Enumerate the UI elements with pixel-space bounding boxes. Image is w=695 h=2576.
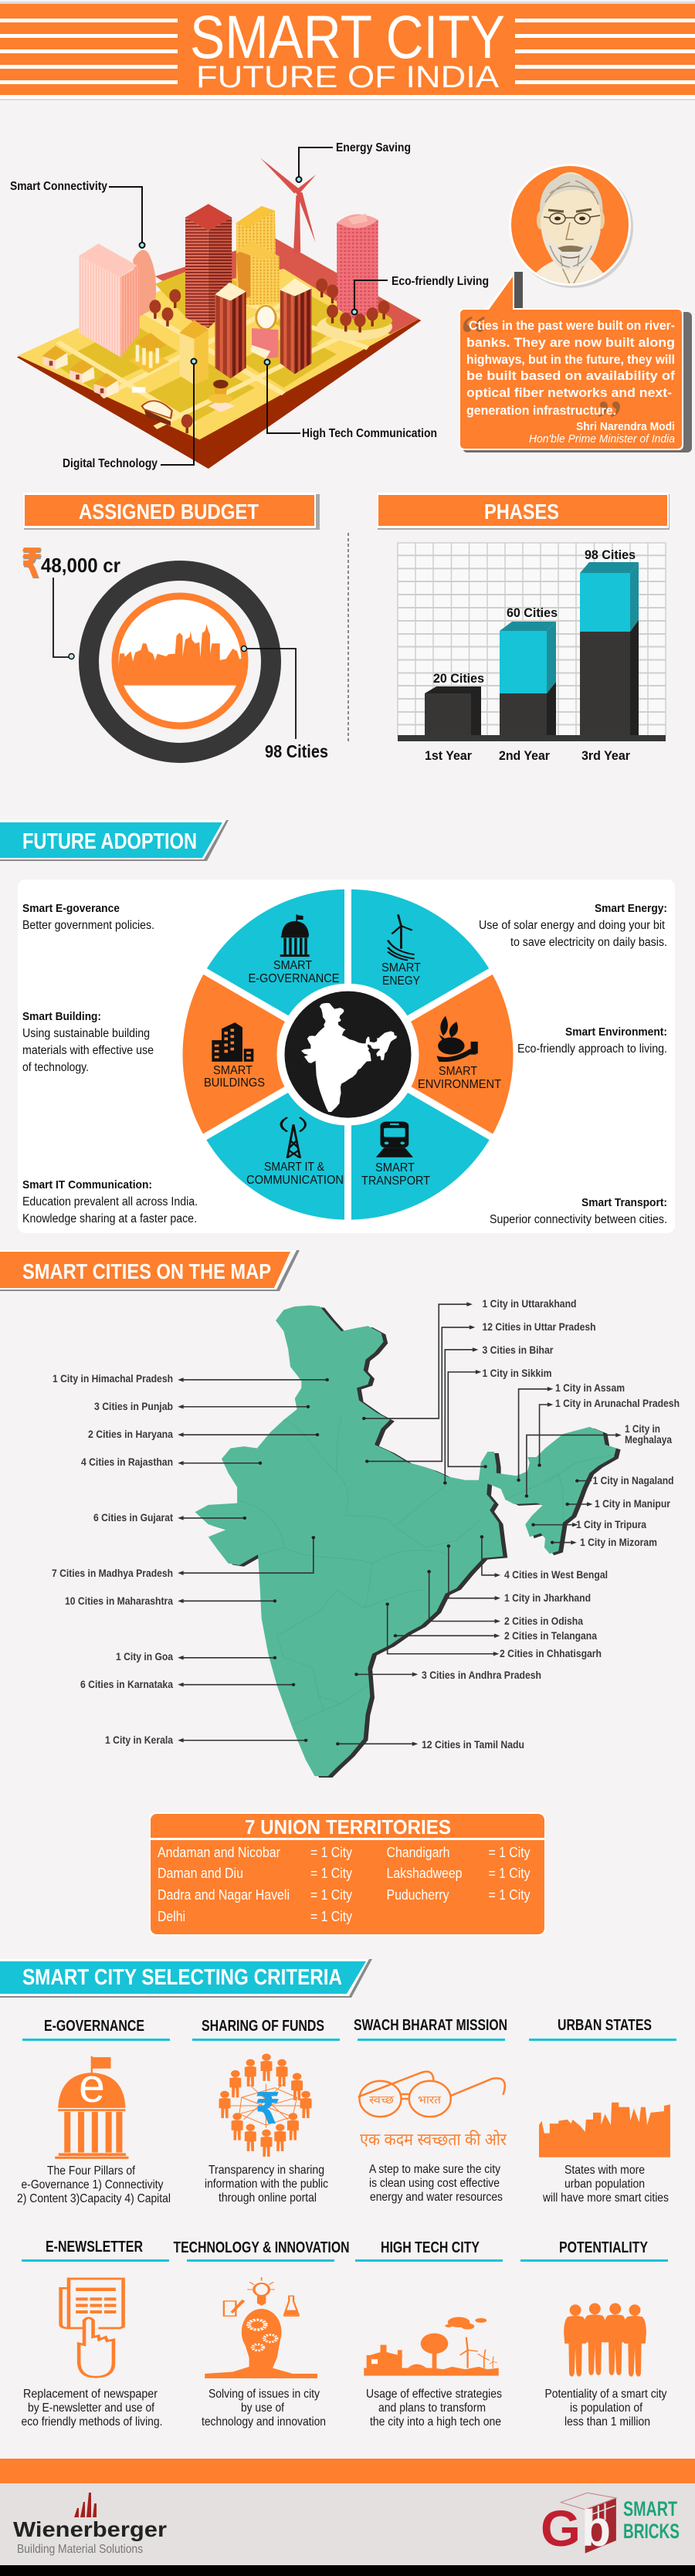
section ribbon: future adoption bbox=[0, 820, 229, 861]
panel: future adoption bbox=[18, 880, 675, 1233]
territory list: Delhi bbox=[158, 1909, 185, 1924]
criterion: swach bharat mission: एक कदम स्वच्छता की ओर bbox=[360, 2130, 507, 2149]
description bbox=[17, 2164, 171, 2205]
territory list: = 1 City bbox=[488, 1887, 530, 1903]
state labels: west: 7 Cities in Madhya Pradesh bbox=[52, 1567, 173, 1579]
clock and shop bbox=[250, 306, 278, 359]
state labels: west: 1 City in Goa bbox=[116, 1650, 173, 1663]
description: Transparency in sharing bbox=[208, 2164, 324, 2177]
criterion: e-newsletter bbox=[22, 2239, 169, 2429]
criterion: potentiality bbox=[520, 2239, 668, 2429]
text: smart IT communication: Education prevalent all across India. bbox=[22, 1195, 198, 1208]
axis labels: 2nd Year bbox=[499, 748, 550, 763]
logo: GB Smart Bricks: b bbox=[581, 2500, 611, 2557]
section ribbon: smart city selecting criteria bbox=[0, 1959, 372, 1998]
state labels: east: 1 City in Assam bbox=[555, 1381, 625, 1394]
wheel labels: SMART bbox=[381, 961, 421, 974]
salmon dome tower bbox=[133, 250, 156, 317]
description: Solving of issues in city bbox=[208, 2388, 320, 2401]
text: smart e-governance bbox=[22, 902, 154, 932]
description bbox=[366, 2388, 502, 2429]
text: smart environment: Smart Environment: bbox=[565, 1025, 667, 1039]
description: and plans to transform bbox=[378, 2401, 486, 2415]
description: urban population bbox=[564, 2178, 645, 2191]
text: smart building: of technology. bbox=[22, 1061, 89, 1074]
territory list: = 1 City bbox=[310, 1845, 352, 1860]
quote text: be built based on availability of bbox=[466, 368, 675, 383]
panel: assigned budget heading bbox=[23, 493, 320, 530]
text: smart energy: Use of solar energy and doing your bit bbox=[479, 919, 666, 932]
quote text bbox=[466, 318, 675, 418]
description: the city into a high tech one bbox=[370, 2415, 501, 2429]
description bbox=[22, 2388, 162, 2429]
wheel labels: COMMUNICATION bbox=[246, 1174, 344, 1187]
skyline bbox=[117, 624, 244, 686]
description bbox=[205, 2164, 328, 2205]
state labels: east: Meghalaya bbox=[625, 1433, 672, 1446]
panel: assigned budget heading: ASSIGNED BUDGET bbox=[79, 500, 259, 524]
icon: newsletter and hand bbox=[61, 2279, 124, 2377]
description: eco friendly methods of living. bbox=[22, 2415, 162, 2429]
state labels: east: 3 Cities in Andhra Pradesh bbox=[422, 1669, 541, 1681]
label: eco-friendly living: Eco-friendly Living bbox=[392, 275, 489, 288]
territory list: Dadra and Nagar Haveli bbox=[158, 1887, 290, 1903]
icon: smart energy turbine bbox=[388, 914, 415, 961]
text: smart transport: Smart Transport: bbox=[581, 1196, 667, 1209]
icon: smart IT tower bbox=[281, 1117, 305, 1158]
description: by E-newsletter and use of bbox=[28, 2401, 154, 2415]
state labels: west: 3 Cities in Punjab bbox=[94, 1400, 173, 1412]
state labels: west: 6 Cities in Gujarat bbox=[93, 1511, 173, 1524]
description: energy and water resources bbox=[370, 2191, 503, 2204]
quote text: generation infrastructure. bbox=[466, 403, 616, 418]
icon: white India map bbox=[301, 1003, 397, 1112]
wheel labels: SMART bbox=[439, 1065, 477, 1078]
icon: beaker bbox=[284, 2296, 299, 2316]
label: high tech communication: High Tech Communication bbox=[302, 427, 437, 440]
criterion: swach bharat mission: भारत bbox=[418, 2093, 442, 2106]
state labels: east: 1 City in Nagaland bbox=[593, 1474, 673, 1486]
leader dots bbox=[243, 1378, 579, 1745]
budget amount: ₹ bbox=[21, 541, 42, 587]
description: The Four Pillars of bbox=[47, 2164, 135, 2178]
text: smart energy: Smart Energy: bbox=[595, 902, 667, 915]
state labels: west: 1 City in Kerala bbox=[105, 1734, 173, 1746]
territory list: Daman and Diu bbox=[158, 1866, 243, 1881]
text: smart e-governance: Better government policies. bbox=[22, 919, 154, 932]
description: Usage of effective strategies bbox=[366, 2388, 502, 2401]
quote marks: ” bbox=[596, 388, 623, 455]
icon: group of people bbox=[564, 2303, 646, 2377]
text: smart transport bbox=[490, 1196, 667, 1226]
panel: phases heading bbox=[377, 493, 670, 530]
title: SMART CITY bbox=[190, 2, 505, 71]
rose tower bbox=[337, 214, 378, 320]
text: smart energy bbox=[479, 902, 667, 949]
axis labels: 3rd Year bbox=[581, 748, 630, 763]
isometric smart city illustration bbox=[17, 158, 421, 469]
yellow middle tower bbox=[236, 241, 280, 305]
market stall bbox=[142, 401, 172, 426]
city callout lines and labels bbox=[10, 141, 489, 470]
criterion: potentiality: POTENTIALITY bbox=[559, 2239, 649, 2256]
logo: GB Smart Bricks: G bbox=[541, 2500, 581, 2557]
icon: people around rupee bbox=[219, 2054, 312, 2157]
quote box with speech tail bbox=[459, 272, 692, 455]
quote attribution bbox=[529, 420, 675, 446]
striped tower left bbox=[215, 283, 246, 378]
portrait: Narendra Modi bbox=[509, 164, 633, 288]
state labels: east: 1 City in Jharkhand bbox=[504, 1591, 591, 1604]
state labels: east: 1 City in Mizoram bbox=[580, 1536, 657, 1548]
quote attribution: Shri Narendra Modi bbox=[576, 420, 675, 433]
text: smart building bbox=[22, 1010, 154, 1074]
quote text: banks. They are now built along bbox=[466, 335, 675, 350]
section ribbon: smart cities on the map: SMART CITIES ON THE MAP bbox=[22, 1259, 271, 1283]
wheel labels: E-GOVERNANCE bbox=[249, 972, 340, 985]
description bbox=[369, 2163, 503, 2204]
quote text: Cties in the past were built on river- bbox=[469, 318, 675, 333]
state labels: west: 1 City in Himachal Pradesh bbox=[53, 1372, 173, 1385]
budget donut chart bbox=[21, 541, 328, 761]
criterion: e-newsletter: E-NEWSLETTER bbox=[46, 2239, 143, 2256]
leader lines bbox=[179, 1304, 619, 1744]
criterion: sharing of funds bbox=[192, 2018, 340, 2205]
description: is clean using cost effective bbox=[369, 2177, 500, 2190]
logo: Wienerberger bbox=[13, 2493, 167, 2556]
text: smart environment bbox=[517, 1025, 667, 1056]
bar value labels: 98 Cities bbox=[585, 547, 636, 562]
icon: e-governance building bbox=[55, 2056, 128, 2159]
icon: smart buildings bbox=[212, 1022, 253, 1062]
quote text: highways, but in the future, they will bbox=[466, 352, 675, 367]
description: 2) Content 3)Capacity 4) Capital bbox=[17, 2192, 171, 2205]
description: by use of bbox=[241, 2401, 284, 2415]
trees bbox=[149, 279, 390, 433]
section ribbon: smart cities on the map bbox=[0, 1250, 300, 1291]
bar value labels: 60 Cities bbox=[507, 605, 558, 620]
pink tall tower bbox=[79, 244, 140, 358]
axis labels: 1st Year bbox=[425, 748, 472, 763]
state labels: east: 4 Cities in West Bengal bbox=[504, 1568, 608, 1581]
quote text: optical fiber networks and next- bbox=[466, 385, 672, 400]
territory list: = 1 City bbox=[310, 1909, 352, 1924]
text: smart IT communication: Smart IT Communication: bbox=[22, 1178, 152, 1191]
car bbox=[132, 387, 145, 392]
bar value labels: 20 Cities bbox=[433, 671, 484, 686]
dark red tower bbox=[185, 204, 232, 328]
criterion: technology and innovation bbox=[173, 2239, 349, 2429]
description: information with the public bbox=[205, 2178, 328, 2191]
striped tower right bbox=[280, 279, 312, 374]
criterion: high tech city bbox=[355, 2239, 503, 2429]
state labels: east: 1 City in Arunachal Pradesh bbox=[555, 1397, 680, 1409]
icon: urban skyline bbox=[539, 2103, 670, 2157]
logo: Wienerberger: Wienerberger bbox=[13, 2517, 167, 2541]
description: States with more bbox=[564, 2164, 645, 2177]
section ribbon: future adoption: FUTURE ADOPTION bbox=[22, 829, 197, 854]
territory list: Puducherry bbox=[386, 1887, 449, 1903]
logo: GB Smart Bricks bbox=[541, 2493, 680, 2557]
criterion: swach bharat mission: स्वच्छ bbox=[369, 2093, 395, 2106]
wheel labels: SMART bbox=[273, 959, 312, 972]
state labels: east: 1 City in bbox=[625, 1422, 660, 1435]
quote marks: “ bbox=[460, 303, 487, 370]
description bbox=[545, 2388, 667, 2429]
wind turbine bbox=[260, 158, 316, 253]
state labels: east: 1 City in Tripura bbox=[576, 1518, 646, 1530]
cities count: 98 Cities bbox=[265, 741, 328, 761]
yellow back tower bbox=[236, 206, 276, 259]
logo: Wienerberger: Building Material Solutions bbox=[17, 2543, 143, 2556]
text: smart building: Using sustainable building bbox=[22, 1027, 150, 1040]
wheel labels: TRANSPORT bbox=[361, 1174, 430, 1188]
criterion: swach bharat mission: SWACH BHARAT MISSION bbox=[354, 2017, 507, 2034]
axis labels bbox=[425, 748, 630, 763]
text: smart transport: Superior connectivity between cities. bbox=[490, 1213, 667, 1226]
icon: Gandhi glasses bbox=[358, 2072, 505, 2117]
state labels: east: 2 Cities in Odisha bbox=[504, 1615, 583, 1627]
leader arrowheads bbox=[178, 1302, 622, 1746]
wheel labels: BUILDINGS bbox=[204, 1076, 265, 1090]
bar: 1st year bbox=[425, 686, 481, 735]
territory list: = 1 City bbox=[488, 1866, 530, 1881]
criterion: e-governance bbox=[17, 2018, 171, 2205]
bar: 2nd year bbox=[500, 622, 556, 735]
state labels: west bbox=[52, 1372, 173, 1746]
text: smart IT communication: Knowledge sharing at a faster pace. bbox=[22, 1212, 197, 1225]
state labels: west: 6 Cities in Karnataka bbox=[80, 1678, 173, 1690]
budget amount: ₹ bbox=[22, 542, 43, 588]
budget amount bbox=[21, 541, 120, 588]
text: smart IT communication bbox=[22, 1178, 198, 1225]
subtitle: FUTURE OF INDIA bbox=[196, 60, 499, 94]
description: Replacement of newspaper bbox=[23, 2388, 158, 2401]
wheel labels: ENEGY bbox=[382, 974, 420, 988]
description: through online portal bbox=[219, 2191, 317, 2205]
icon: green city bbox=[364, 2317, 499, 2376]
label: digital technology: Digital Technology bbox=[63, 457, 158, 470]
quote marks bbox=[460, 303, 623, 455]
state labels: east: 2 Cities in Telangana bbox=[504, 1629, 597, 1642]
description bbox=[202, 2388, 326, 2429]
section ribbon: smart city selecting criteria: SMART CITY SELECTING CRITERIA bbox=[22, 1965, 342, 1990]
territory list: = 1 City bbox=[488, 1845, 530, 1860]
territory list bbox=[158, 1845, 530, 1924]
criterion: e-governance: E-GOVERNANCE bbox=[44, 2018, 144, 2035]
icon: smart transport train bbox=[376, 1122, 413, 1158]
wheel labels: SMART bbox=[375, 1161, 415, 1174]
wheel labels: ENVIRONMENT bbox=[418, 1078, 501, 1091]
criterion: e-governance: e bbox=[79, 2059, 105, 2113]
territory list: Andaman and Nicobar bbox=[158, 1845, 280, 1860]
criterion: swach bharat mission bbox=[354, 2017, 507, 2204]
state labels: east: 12 Cities in Tamil Nadu bbox=[422, 1738, 524, 1751]
territory list: = 1 City bbox=[310, 1866, 352, 1881]
text: smart energy: to save electricity on daily basis. bbox=[510, 936, 667, 949]
criterion: sharing of funds: ₹ bbox=[255, 2084, 280, 2134]
state labels: east: 3 Cities in Bihar bbox=[482, 1344, 554, 1356]
footer logos panel bbox=[0, 2483, 695, 2576]
panel: 7 union territories bbox=[149, 1812, 546, 1936]
label: smart connectivity: Smart Connectivity bbox=[10, 180, 107, 193]
text: smart building: Smart Building: bbox=[22, 1010, 101, 1023]
header banner bbox=[0, 2, 695, 100]
description: e-Governance 1) Connectivity bbox=[22, 2178, 164, 2191]
criterion: high tech city: HIGH TECH CITY bbox=[381, 2239, 480, 2256]
description: is population of bbox=[570, 2401, 642, 2415]
icon: bulb bbox=[247, 2277, 275, 2306]
state labels: east: 2 Cities in Chhatisgarh bbox=[500, 1647, 602, 1659]
panel: 7 union territories: 7 UNION TERRITORIES bbox=[245, 1815, 451, 1839]
territory list: Chandigarh bbox=[386, 1845, 449, 1860]
budget amount: 48,000 cr bbox=[41, 554, 120, 577]
panel: phases heading: PHASES bbox=[484, 500, 559, 524]
bar value labels bbox=[433, 547, 636, 686]
cup monument bbox=[208, 380, 235, 412]
icon: head with gears bbox=[205, 2277, 317, 2378]
houses bbox=[42, 346, 119, 397]
state labels: west: 10 Cities in Maharashtra bbox=[65, 1595, 173, 1607]
quote attribution: Hon'ble Prime Minister of India bbox=[529, 432, 675, 446]
criterion: technology and innovation: TECHNOLOGY & INNOVATION bbox=[173, 2239, 349, 2256]
India map with state leader lines bbox=[52, 1297, 680, 1778]
icon: tablet and pen bbox=[224, 2300, 245, 2316]
text: smart e-governance: Smart E-goverance bbox=[22, 902, 120, 915]
state labels: east: 12 Cities in Uttar Pradesh bbox=[482, 1320, 596, 1333]
bar chart: phases bbox=[398, 543, 666, 763]
description bbox=[542, 2164, 669, 2205]
wheel labels: SMART IT & bbox=[264, 1161, 324, 1174]
description: will have more smart cities bbox=[542, 2191, 669, 2205]
wheel labels bbox=[204, 959, 501, 1188]
state labels: east bbox=[422, 1297, 680, 1751]
icon: e-governance dome bbox=[280, 914, 310, 957]
state labels: east: 1 City in Manipur bbox=[595, 1497, 670, 1510]
footer band bbox=[0, 2459, 695, 2483]
wheel labels: SMART bbox=[213, 1064, 253, 1077]
text: smart environment: Eco-friendly approach to living. bbox=[517, 1042, 667, 1056]
state labels: west: 4 Cities in Rajasthan bbox=[81, 1456, 173, 1468]
state labels: east: 1 City in Uttarakhand bbox=[482, 1297, 576, 1310]
icon: smart environment bbox=[436, 1016, 478, 1062]
territory list: = 1 City bbox=[310, 1887, 352, 1903]
criterion: sharing of funds: SHARING OF FUNDS bbox=[202, 2018, 324, 2035]
description: A step to make sure the city bbox=[369, 2163, 500, 2176]
criterion: urban states bbox=[529, 2017, 676, 2205]
criterion: urban states: URBAN STATES bbox=[558, 2017, 652, 2034]
text: smart building: materials with effective use bbox=[22, 1044, 154, 1057]
description: Potentiality of a smart city bbox=[545, 2388, 667, 2401]
bar: 3rd year bbox=[580, 562, 639, 735]
state labels: west: 2 Cities in Haryana bbox=[88, 1428, 173, 1440]
label: energy saving: Energy Saving bbox=[336, 141, 411, 154]
temple bbox=[128, 333, 169, 373]
state labels: east: 1 City in Sikkim bbox=[482, 1367, 551, 1379]
wheel diagram bbox=[183, 884, 513, 1225]
description: less than 1 million bbox=[564, 2415, 650, 2429]
yellow front tower bbox=[179, 320, 208, 385]
description: technology and innovation bbox=[202, 2415, 326, 2429]
territory list: Lakshadweep bbox=[386, 1866, 462, 1881]
